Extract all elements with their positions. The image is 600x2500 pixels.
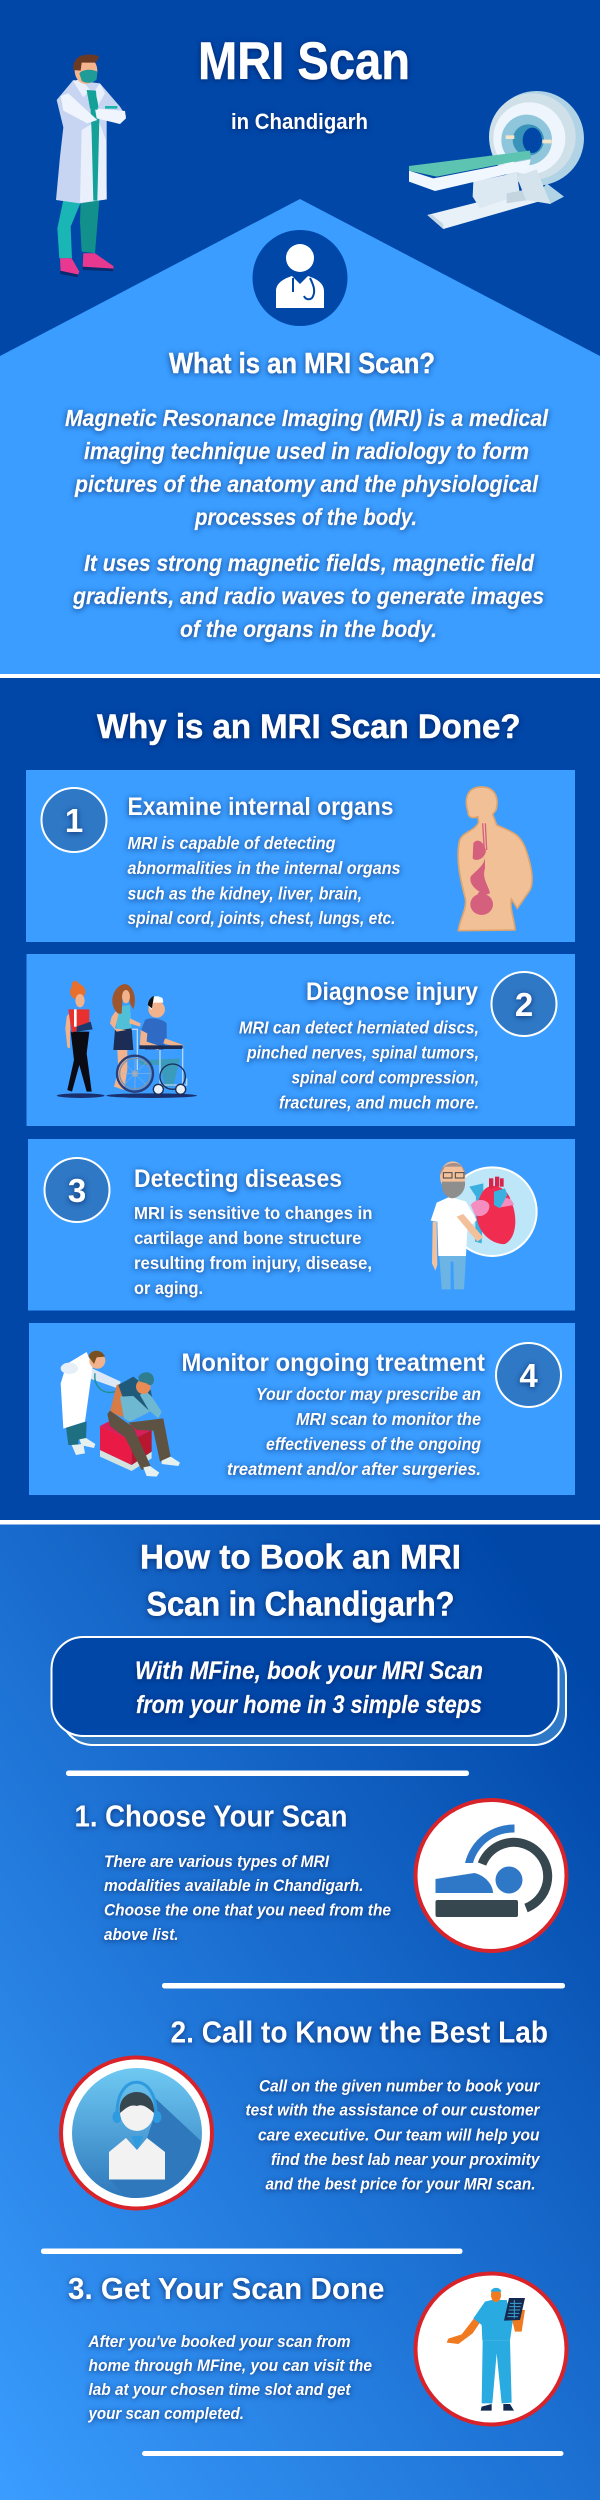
panel: diagnose injury [26,954,575,1126]
body text: MRI scan to monitor the [296,1409,481,1429]
text block: definition: processes of the body. [194,504,417,530]
heading: what is an MRI scan: What is an MRI Scan? [169,348,435,380]
body text: effectiveness of the ongoing [266,1434,481,1454]
step 2: call to know the best lab: 2. Call to Know the Best Lab [170,2014,548,2050]
body text: cartilage and bone structure [134,1228,362,1248]
body text: resulting from injury, disease, [134,1253,372,1273]
body text: spinal cord, joints, chest, lungs, etc. [128,908,396,928]
step 1 text: There are various types of MRI [104,1853,329,1871]
number badge 1: 1 [65,802,83,839]
icon: doctor examining patient [61,1351,180,1477]
heading: Diagnose injury [306,978,478,1006]
body text [239,1018,479,1112]
heading: Monitor ongoing treatment [182,1349,486,1377]
text block: definition: Magnetic Resonance Imaging (MRI) is a medical [65,405,549,431]
heading: how to book [140,1538,461,1624]
body text: MRI is capable of detecting [128,833,336,853]
number badge 2 [492,972,556,1036]
step 1: choose your scan [74,1798,566,1951]
icon: MRI scanner in circle [416,1800,566,1951]
icon: doctor badge [252,230,348,326]
step 1 text: modalities available in Chandigarh. [104,1877,364,1895]
step 3: get your scan done: 3. Get Your Scan Done [68,2271,384,2306]
heading: how to book: Scan in Chandigarh? [146,1586,454,1624]
icon: injured people with wheelchair [57,981,197,1098]
number badge 1 [42,788,106,852]
heading: why is an MRI scan done: Why is an MRI Scan Done? [97,708,520,746]
body text: Your doctor may prescribe an [256,1384,481,1404]
icon: torso with organs [458,787,532,931]
step 2 text: find the best lab near your proximity [271,2151,540,2169]
callout: book in 3 steps: With MFine, book your MRI Scan [135,1657,483,1685]
step 3: get your scan done [68,2271,566,2424]
number badge 2: 2 [515,986,533,1023]
number badge 3 [44,1158,110,1222]
step 3 text: After you've booked your scan from [88,2333,351,2351]
text block: how it works: It uses strong magnetic fields, magnetic field [84,550,535,576]
icon: man with heart [431,1161,537,1289]
callout: book in 3 steps [52,1637,566,1745]
body text [227,1384,481,1479]
body text: fractures, and much more. [279,1092,479,1112]
icon: MRI machine [409,91,584,229]
body text: treatment and/or after surgeries. [227,1459,481,1479]
step 3 text [88,2333,372,2423]
callout: book in 3 steps: from your home in 3 simple steps [136,1691,482,1719]
text block: how it works [72,550,544,642]
panel: monitor ongoing treatment [29,1323,575,1495]
body text [128,833,401,928]
heading: Examine internal organs [128,793,394,821]
number badge 4 [496,1343,561,1407]
icon: doctor illustration [56,54,126,277]
step 1 text: above list. [104,1926,178,1944]
step 2 text: care executive. Our team will help you [258,2126,540,2144]
step 2 text: and the best price for your MRI scan. [266,2176,536,2194]
text block: definition: imaging technique used in radiology to form [84,438,529,464]
text block: how it works: of the organs in the body. [180,616,437,642]
body text: such as the kidney, liver, brain, [128,884,362,904]
text block: definition: pictures of the anatomy and the physiological [74,471,539,497]
text block: how it works: gradients, and radio waves to generate images [72,583,544,609]
step 3 text: lab at your chosen time slot and get [88,2381,352,2399]
panel: how to book [0,1520,600,2500]
step 1 text [104,1853,391,1944]
step 3 text: home through MFine, you can visit the [88,2357,372,2375]
body text: abnormalities in the internal organs [128,858,401,878]
body text: MRI can detect herniated discs, [239,1018,479,1038]
step 3 text: your scan completed. [88,2405,244,2423]
panel: examine internal organs [26,770,575,942]
body text: spinal cord compression, [292,1068,479,1088]
icon: customer care agent in circle [61,2058,212,2208]
panel: detecting diseases [28,1139,575,1310]
title: MRI Scan [198,32,410,91]
step 1: choose your scan: 1. Choose Your Scan [74,1798,348,1834]
heading: Detecting diseases [134,1165,342,1193]
step 2 text: Call on the given number to book your [259,2078,541,2096]
step 2 text: test with the assistance of our customer [246,2102,541,2120]
heading: how to book: How to Book an MRI [140,1538,461,1576]
icon: technician with x-ray in circle [416,2274,566,2424]
number badge 4: 4 [519,1357,538,1394]
body text: pinched nerves, spinal tumors, [246,1042,479,1062]
subtitle: in Chandigarh [231,109,368,134]
step 1 text: Choose the one that you need from the [104,1902,391,1920]
body text: or aging. [134,1278,203,1298]
step 2: call to know the best lab [61,2014,548,2208]
step 2 text [246,2078,541,2194]
body text: MRI is sensitive to changes in [134,1203,372,1223]
number badge 3: 3 [68,1172,86,1209]
body text [134,1203,372,1298]
text block: definition [65,405,549,530]
panel: what is an MRI scan [0,199,600,674]
